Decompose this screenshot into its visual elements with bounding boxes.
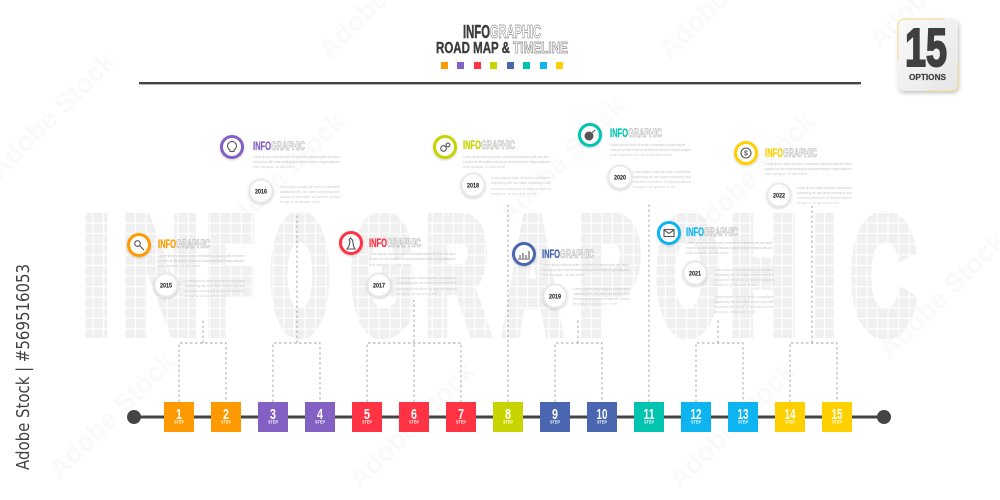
heading: [765, 146, 817, 160]
detail text: Lorem ipsum dolor sit amet, consectetur: [797, 186, 853, 190]
description: [765, 162, 852, 176]
step 13: 13: [738, 407, 748, 423]
background grid word: I: [83, 184, 110, 366]
heading: GRAPHIC: [387, 236, 421, 250]
heading: [253, 139, 305, 153]
icon: bar chart: [514, 244, 534, 264]
step 7: STEP: [456, 420, 466, 424]
detail text: adipiscing elit, sed diam nonummy nibh: [714, 300, 774, 304]
description: [369, 252, 456, 267]
description: Lorem ipsum dolor sit amet, consectetur adipiscing elit, sed diam: [463, 155, 550, 159]
stock image id: Adobe Stock | #569516053: [14, 264, 34, 470]
detail text: magna aliquam erat: [491, 192, 537, 196]
background grid word: O: [270, 184, 330, 366]
detail text: euismod tincidunt ut laoreet dolore: [491, 187, 551, 191]
description: nonummy nibh euismod tincidunt ut laoreet dolore magna: [610, 148, 692, 152]
icon: gears: [434, 136, 456, 158]
step 2: STEP: [221, 420, 231, 424]
description: Lorem ipsum dolor sit amet, consectetur adipiscing elit, sed diam: [542, 263, 629, 267]
background grid word: I: [813, 184, 836, 366]
step 8: 8: [505, 407, 511, 423]
background grid word: G: [351, 184, 414, 366]
step 15: 15: [832, 407, 842, 423]
background grid word: H: [730, 184, 797, 366]
step 4: 4: [317, 407, 323, 423]
heading: INFO: [686, 225, 704, 239]
icon: magnifier: [128, 234, 150, 256]
detail text: euismod tincidunt ut laoreet dolore: [397, 287, 457, 291]
step 13: [728, 402, 758, 432]
step 10: STEP: [597, 420, 607, 424]
description: erat volutpat. Ut wisi enim: [765, 172, 807, 176]
description: erat volutpat. Ut wisi enim: [158, 264, 200, 268]
description: Lorem ipsum dolor sit amet, consectetur adipiscing elit, sed diam: [158, 254, 245, 258]
description: Lorem ipsum dolor sit amet, consectetur adipiscing elit, sed diam: [253, 155, 340, 159]
heading: [610, 126, 662, 140]
colour legend squares: [441, 62, 563, 69]
detail text: [397, 276, 458, 296]
heading: INFO: [610, 126, 628, 140]
step 9: [540, 402, 570, 432]
step 9: STEP: [550, 420, 560, 424]
detail text: adipiscing elit, sed diam nonummy nibh: [397, 281, 457, 285]
step 14: STEP: [785, 420, 795, 424]
step 1: STEP: [174, 420, 184, 424]
detail text: magna aliquam erat: [797, 201, 840, 205]
description: erat volutpat. Ut wisi enim: [542, 273, 584, 277]
description: erat volutpat. Ut wisi enim: [463, 165, 505, 169]
detail text: magna aliquam erat: [633, 185, 676, 189]
detail text: adipiscing elit, sed diam nonummy nibh: [491, 181, 551, 185]
year 2021: 2021: [689, 270, 701, 278]
background grid word: F: [206, 184, 254, 366]
step 12: STEP: [691, 420, 701, 424]
detail text: [797, 186, 853, 205]
step 8: [493, 402, 523, 432]
watermark pattern: Adobe Stock: [343, 356, 482, 494]
detail text: [714, 268, 775, 314]
heading: INFO: [765, 146, 783, 160]
step 7: 7: [458, 407, 464, 423]
step 11: STEP: [644, 420, 654, 424]
step 4: [305, 402, 335, 432]
connector brackets: [179, 203, 837, 402]
description: erat volutpat. Ut wisi enim: [253, 165, 295, 169]
watermark pattern: Adobe Stock: [663, 356, 802, 494]
detail text: Lorem ipsum dolor sit amet, consectetur: [491, 176, 552, 180]
detail text: adipiscing elit, sed diam nonummy nibh: [633, 175, 691, 179]
detail text: euismod tincidunt ut laoreet dolore: [280, 195, 340, 199]
step 15: STEP: [832, 420, 842, 424]
heading: [686, 225, 738, 239]
heading: GRAPHIC: [783, 146, 817, 160]
step 7: [446, 402, 476, 432]
detail text: euismod tincidunt ut laoreet dolore: [797, 196, 852, 200]
description: nonummy nibh euismod tincidunt ut laoreet dolore magna aliquam: [463, 160, 550, 164]
detail text: euismod tincidunt ut laoreet dolore: [573, 297, 630, 301]
year 2022: 2022: [773, 192, 785, 200]
description: [686, 241, 773, 255]
description: nonummy nibh euismod tincidunt ut laoreet dolore magna aliquam: [253, 160, 340, 164]
step 6: [399, 402, 429, 432]
year 2018: 2018: [467, 182, 479, 190]
description: erat volutpat. Ut wisi enim: [369, 263, 411, 267]
milestone 2015: [128, 234, 246, 298]
watermark pattern: Adobe Stock: [43, 346, 182, 484]
milestone 2018: [434, 136, 552, 196]
background grid word: P: [578, 184, 640, 366]
detail text: adipiscing elit, sed diam nonummy nibh: [714, 273, 774, 277]
step 12: [681, 402, 711, 432]
description: Lorem ipsum dolor sit amet, consectetur adipiscing elit, sed diam: [765, 162, 852, 166]
year 2020: 2020: [614, 174, 626, 182]
badge: 15 options: [898, 18, 958, 91]
detail text: Lorem ipsum dolor sit amet, consectetur: [633, 170, 692, 174]
background grid word: O: [656, 184, 720, 366]
detail text: magna aliquam erat: [280, 200, 321, 204]
description: nonummy nibh euismod tincidunt ut laoreet dolore magna aliquam: [158, 259, 245, 263]
step 3: 3: [270, 407, 276, 423]
step squares: [164, 402, 852, 432]
detail text: magna aliquam erat: [714, 283, 757, 287]
step 2: [211, 402, 241, 432]
heading: INFO: [542, 247, 560, 261]
step 9: 9: [552, 407, 558, 423]
icon: envelope: [658, 222, 680, 244]
step 10: 10: [596, 407, 608, 423]
title line one: GRAPHIC: [490, 22, 541, 42]
heading: GRAPHIC: [176, 237, 210, 251]
title line two: TIMELINE: [513, 40, 568, 57]
watermark pattern: Adobe Stock: [213, 106, 352, 244]
watermark pattern: Adobe Stock: [493, 91, 632, 229]
title line two: ROAD MAP &: [436, 40, 510, 57]
detail text: Lorem ipsum dolor sit amet, consectetur: [185, 279, 246, 283]
step 14: [775, 402, 805, 432]
step 11: 11: [644, 407, 654, 423]
step 4: STEP: [315, 420, 325, 424]
step 13: STEP: [738, 420, 748, 424]
heading: GRAPHIC: [481, 138, 515, 152]
watermark pattern: Adobe Stock: [683, 106, 822, 244]
heading: GRAPHIC: [271, 139, 305, 153]
milestone 2022: [736, 142, 853, 206]
icon: chess piece: [340, 232, 362, 254]
heading: [463, 138, 515, 152]
milestone 2017: [340, 232, 458, 296]
milestone 2021: [658, 222, 775, 314]
step 2: 2: [223, 407, 229, 423]
step 6: STEP: [409, 420, 419, 424]
detail text: [280, 185, 341, 204]
description: Lorem ipsum dolor sit amet, consectetur adipiscing elit, sed diam: [686, 241, 773, 245]
detail text: adipiscing elit, sed diam nonummy nibh: [573, 292, 630, 296]
detail text: adipiscing elit, sed diam nonummy nibh: [185, 284, 245, 288]
detail text: magna aliquam erat: [185, 294, 226, 298]
year 2017: 2017: [373, 282, 385, 290]
step 3: [258, 402, 288, 432]
description: [158, 254, 245, 268]
step 8: STEP: [503, 420, 513, 424]
background grid word: C: [851, 184, 915, 366]
detail text: [633, 170, 692, 189]
description: Lorem ipsum dolor sit amet, consectetur adipiscing elit: [610, 143, 686, 147]
detail text: euismod tincidunt ut laoreet dolore: [714, 278, 774, 282]
title line one: INFO: [463, 22, 490, 42]
heading: [542, 247, 594, 261]
icon: dollar coin: $: [744, 150, 748, 158]
heading: [369, 236, 421, 250]
heading: INFO: [369, 236, 387, 250]
badge: 15 options: OPTIONS: [909, 73, 947, 82]
milestone 2016: [222, 136, 341, 204]
step 1: [164, 402, 194, 432]
description: [463, 155, 550, 169]
step 11: [634, 402, 664, 432]
background grid word: R: [425, 184, 488, 366]
detail text: Lorem ipsum dolor sit amet, consectetur: [714, 295, 775, 299]
detail text: adipiscing elit, sed diam nonummy nibh: [280, 190, 340, 194]
detail text: adipiscing elit, sed diam nonummy nibh: [797, 191, 852, 195]
background grid word: N: [122, 184, 199, 366]
detail text: Lorem ipsum dolor sit amet, consectetur: [573, 287, 631, 291]
detail text: Lorem ipsum dolor sit amet, consectetur: [397, 276, 458, 280]
background grid word: A: [504, 184, 562, 366]
icon: light bulb: [222, 136, 242, 158]
detail text: magna aliquam erat: [573, 302, 619, 306]
detail text: [491, 176, 552, 196]
detail text: euismod tincidunt ut laoreet dolore: [185, 289, 243, 293]
icon: target: [580, 124, 600, 146]
detail text: euismod tincidunt ut laoreet dolore: [633, 180, 691, 184]
badge: 15 options: 15: [905, 18, 947, 78]
detail text: euismod tincidunt ut laoreet dolore: [714, 305, 774, 309]
description: erat volutpat. Ut wisi enim: [686, 251, 728, 255]
step 6: 6: [411, 407, 417, 423]
heading: GRAPHIC: [560, 247, 594, 261]
step 10: [587, 402, 617, 432]
description: nonummy nibh euismod tincidunt ut laoreet dolore magna aliquam: [542, 268, 629, 272]
heading: INFO: [463, 138, 481, 152]
step 5: 5: [364, 407, 370, 423]
milestone 2020: [580, 124, 692, 189]
description: [542, 263, 629, 277]
description: Lorem ipsum dolor sit amet, consectetur adipiscing elit, sed diam: [369, 252, 456, 256]
detail text: magna aliquam erat: [397, 292, 438, 296]
step 14: 14: [784, 407, 796, 423]
heading: INFO: [158, 237, 176, 251]
year 2019: 2019: [549, 294, 561, 300]
description: erat volutpat. Ut wisi enim ad minim: [610, 153, 672, 157]
step 5: [352, 402, 382, 432]
heading: [158, 237, 210, 251]
timeline axis: [127, 410, 891, 424]
title line one: [463, 22, 541, 42]
background grid word: [83, 184, 915, 366]
detail text: [185, 279, 246, 298]
description: nonummy nibh euismod tincidunt ut laoreet dolore magna aliquam: [686, 246, 773, 250]
description: [253, 155, 340, 169]
step 3: STEP: [268, 420, 278, 424]
description: [610, 143, 692, 157]
year 2015: 2015: [160, 282, 172, 290]
milestone 2019: [514, 244, 631, 308]
heading: GRAPHIC: [704, 225, 738, 239]
year 2016: 2016: [255, 188, 267, 196]
detail text: [573, 287, 631, 306]
step 1: 1: [176, 407, 182, 423]
detail text: Lorem ipsum dolor sit amet, consectetur: [280, 185, 341, 189]
step 5: STEP: [362, 420, 372, 424]
detail text: magna aliquam erat: [714, 310, 757, 314]
description: nonummy nibh euismod tincidunt ut laoreet dolore magna aliquam: [765, 167, 852, 171]
heading: GRAPHIC: [628, 126, 662, 140]
heading: INFO: [253, 139, 271, 153]
detail text: Lorem ipsum dolor sit amet, consectetur: [714, 268, 775, 272]
title: [436, 22, 568, 57]
step 12: 12: [690, 407, 702, 423]
step 15: [822, 402, 852, 432]
description: nonummy nibh euismod tincidunt ut laoreet dolore magna aliquam: [369, 257, 456, 261]
